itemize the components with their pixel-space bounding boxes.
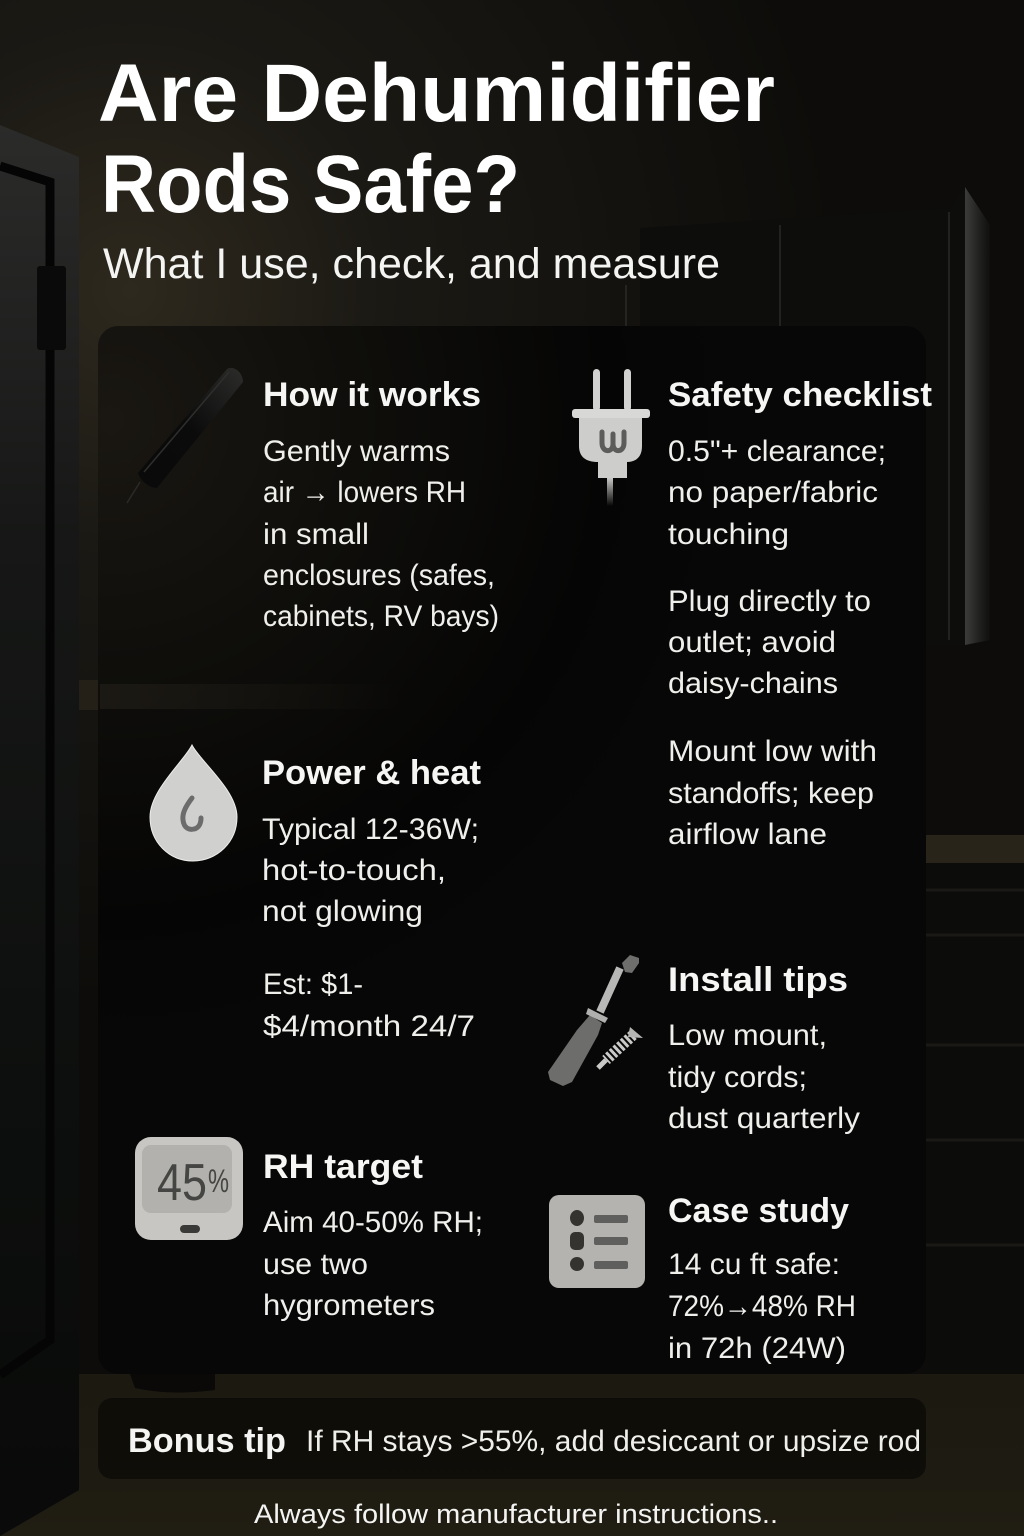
text: wattage: Typical 12-36W; — [262, 813, 479, 846]
text: clearance: no paper/fabric — [668, 476, 878, 509]
text: how it works: in small — [263, 518, 369, 551]
text: RH target: Aim 40-50% RH; — [263, 1206, 483, 1239]
icon: plug — [572, 369, 650, 506]
text: plug directly — [668, 585, 871, 700]
text: mount low: Mount low with — [668, 735, 877, 768]
callout: bonus tip: Bonus tip — [128, 1422, 286, 1460]
footer note: Always follow manufacturer instructions.. — [254, 1499, 778, 1529]
text: case study: in 72h (24W) — [668, 1332, 846, 1365]
text: clearance: 0.5"+ clearance; — [668, 435, 886, 468]
text: plug directly: daisy-chains — [668, 667, 838, 700]
text: case study: 14 cu ft safe: — [668, 1248, 840, 1281]
title: Are Dehumidifier — [98, 48, 775, 139]
text: wattage: hot-to-touch, — [262, 854, 446, 887]
panel: install tips — [548, 955, 860, 1135]
panel: RH target — [135, 1137, 483, 1322]
text: wattage — [262, 813, 479, 928]
panel: safety checklist — [572, 369, 932, 851]
text: mount low: standoffs; keep — [668, 777, 874, 810]
subtitle: What I use, check, and measure — [103, 240, 720, 288]
text: how it works: enclosures (safes, — [263, 559, 495, 592]
icon: hygrometer: % — [208, 1163, 229, 1199]
heading: power and heat: Power & heat — [262, 754, 481, 792]
main content panel — [98, 326, 926, 1374]
text: estimated cost: $4/month 24/7 — [263, 1010, 475, 1043]
text: estimated cost: Est: $1- — [263, 968, 363, 1001]
text: wattage: not glowing — [262, 895, 423, 928]
text: how it works — [263, 435, 499, 633]
icon: hygrometer — [135, 1137, 243, 1240]
text: RH target: use two — [263, 1248, 368, 1281]
heading: how it works: How it works — [263, 376, 481, 414]
heading: case study: Case study — [668, 1192, 849, 1230]
text: RH target — [263, 1206, 483, 1322]
text: install tips: dust quarterly — [668, 1102, 860, 1135]
title: Rods Safe? — [101, 139, 520, 230]
title — [98, 48, 775, 230]
text: clearance: touching — [668, 518, 789, 551]
text: install tips: Low mount, — [668, 1019, 827, 1052]
text: clearance — [668, 435, 886, 551]
panel: how it works — [127, 368, 499, 633]
text: mount low: airflow lane — [668, 818, 827, 851]
icon: screwdriver and screw — [548, 955, 643, 1086]
heading: RH target: RH target — [263, 1148, 423, 1186]
icon: heater rod — [127, 368, 243, 503]
callout: bonus tip: If RH stays >55%, add desiccant or upsize rod — [306, 1425, 921, 1458]
icon: water drop — [150, 745, 237, 861]
heading: install tips: Install tips — [668, 961, 848, 999]
text: install tips — [668, 1019, 860, 1135]
text: how it works: Gently warms — [263, 435, 450, 468]
icon: checklist — [549, 1195, 645, 1288]
text: how it works: cabinets, RV bays) — [263, 600, 499, 633]
text: case study: 72%→48% RH — [668, 1290, 856, 1323]
text: estimated cost — [263, 968, 475, 1043]
panel: case study — [549, 1192, 856, 1365]
icon: hygrometer: 45 — [157, 1154, 207, 1212]
text: how it works: air → lowers RH — [263, 476, 466, 509]
text: case study — [668, 1248, 856, 1365]
text: RH target: hygrometers — [263, 1289, 435, 1322]
text: install tips: tidy cords; — [668, 1061, 807, 1094]
callout: bonus tip — [98, 1398, 926, 1479]
text: plug directly: Plug directly to — [668, 585, 871, 618]
text: mount low — [668, 735, 877, 851]
heading: safety checklist: Safety checklist — [668, 376, 932, 414]
panel: power and heat — [150, 745, 481, 1043]
text: plug directly: outlet; avoid — [668, 626, 836, 659]
